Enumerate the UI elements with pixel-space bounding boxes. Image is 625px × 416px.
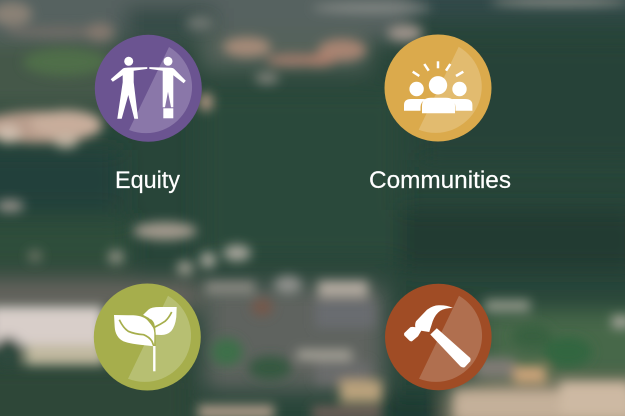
hammer	[404, 305, 471, 368]
icon: communities badge	[384, 34, 492, 142]
icon: equity badge	[95, 35, 202, 142]
seedling	[114, 307, 177, 371]
text: Communities label: Communities	[369, 167, 511, 194]
icon: environment badge	[94, 284, 201, 390]
icon: hammer badge	[385, 284, 492, 390]
text: Equity label: Equity	[115, 167, 180, 194]
figure: standing on a box	[149, 57, 186, 118]
figure: standing on the ground	[111, 57, 147, 119]
rays of light	[413, 61, 463, 76]
people group	[404, 76, 472, 113]
